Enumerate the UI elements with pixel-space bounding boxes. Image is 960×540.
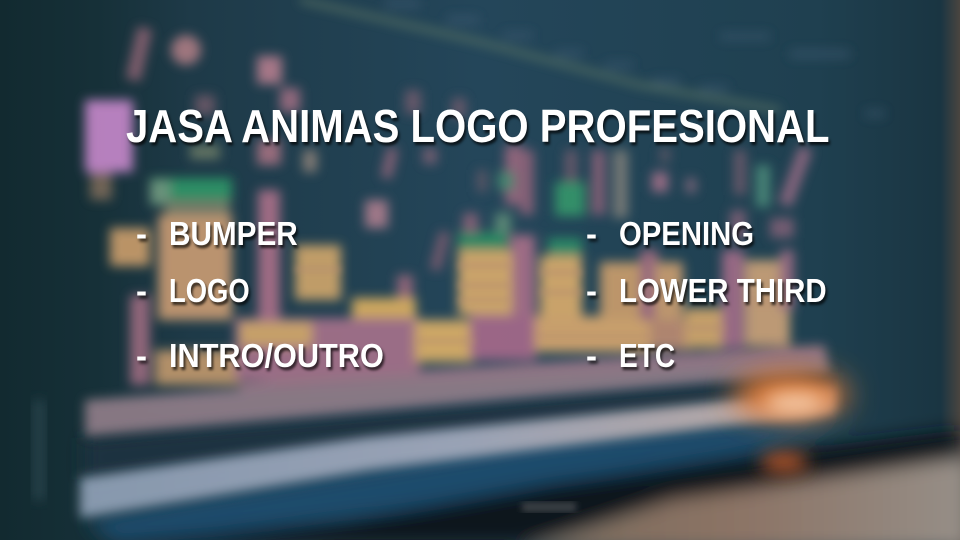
bezel reflection bbox=[760, 452, 808, 472]
list item: lower third: - bbox=[586, 272, 597, 309]
orange light glow bbox=[732, 371, 848, 419]
monitor logo bbox=[522, 502, 576, 512]
list item: opening: - bbox=[586, 215, 597, 252]
list item: logo: LOGO bbox=[169, 272, 250, 309]
clip stripes bbox=[295, 263, 790, 343]
list item: intro/outro: INTRO/OUTRO bbox=[169, 337, 384, 374]
list item: opening: OPENING bbox=[619, 215, 754, 252]
list item: etc bbox=[586, 337, 677, 374]
list item: etc: ETC bbox=[619, 337, 675, 374]
list item: logo bbox=[136, 272, 252, 309]
list item: lower third: LOWER THIRD bbox=[619, 272, 827, 309]
title: JASA ANIMAS LOGO PROFESIONAL bbox=[126, 100, 829, 152]
list item: intro/outro: - bbox=[136, 337, 147, 374]
list item: bumper: - bbox=[136, 215, 147, 252]
list item: bumper: BUMPER bbox=[169, 215, 298, 252]
list item: logo: - bbox=[136, 272, 147, 309]
left scrollbar hint bbox=[32, 400, 46, 500]
list item: etc: - bbox=[586, 337, 597, 374]
lower screen and monitor bezel bbox=[80, 372, 960, 540]
